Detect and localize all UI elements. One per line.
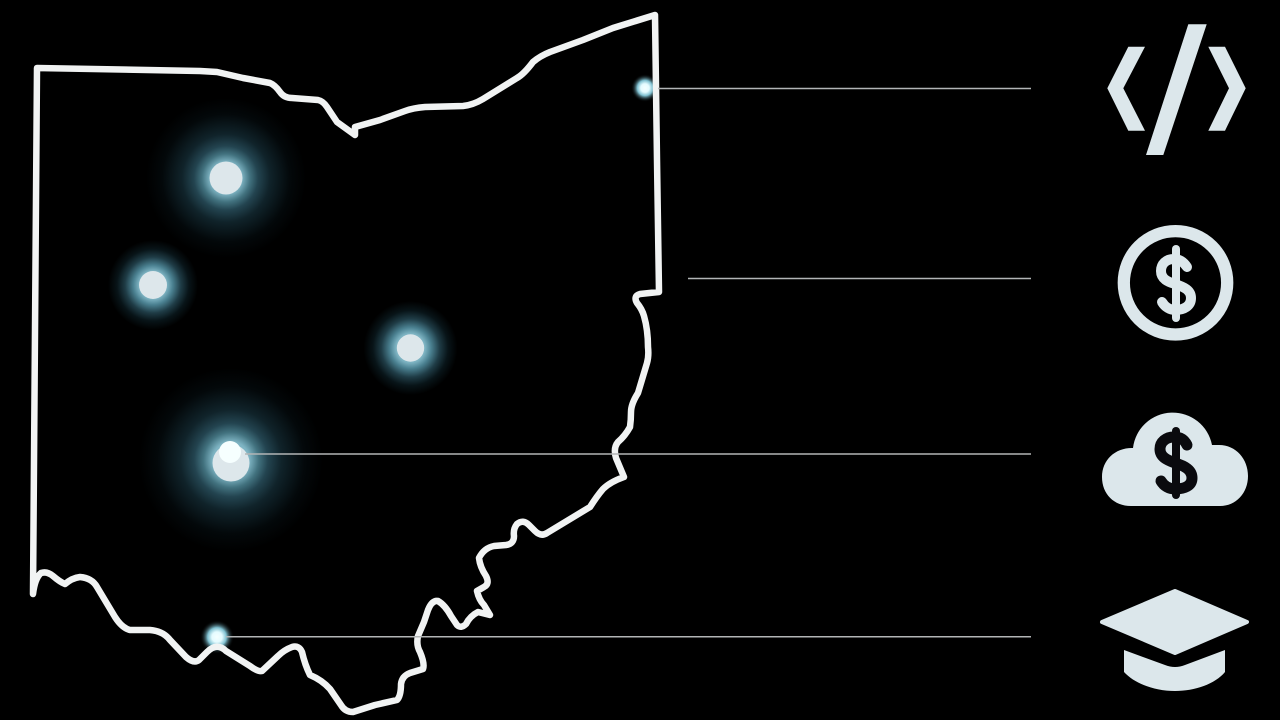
icon: cloud with dollar — [1102, 413, 1248, 506]
glowing city dots — [108, 74, 659, 654]
dot: north-west city — [146, 98, 306, 258]
dot: central city — [364, 301, 458, 395]
dot: north-east point — [631, 74, 659, 102]
icon: code brackets — [1107, 24, 1246, 155]
dot: south-west city — [139, 368, 323, 552]
map: Ohio outline — [33, 15, 659, 712]
dot: southern point — [200, 620, 234, 654]
connector lines — [226, 88, 1031, 637]
icon: dollar coin — [1124, 231, 1227, 334]
icon: graduation cap — [1102, 591, 1247, 691]
dot: west city — [108, 240, 198, 330]
